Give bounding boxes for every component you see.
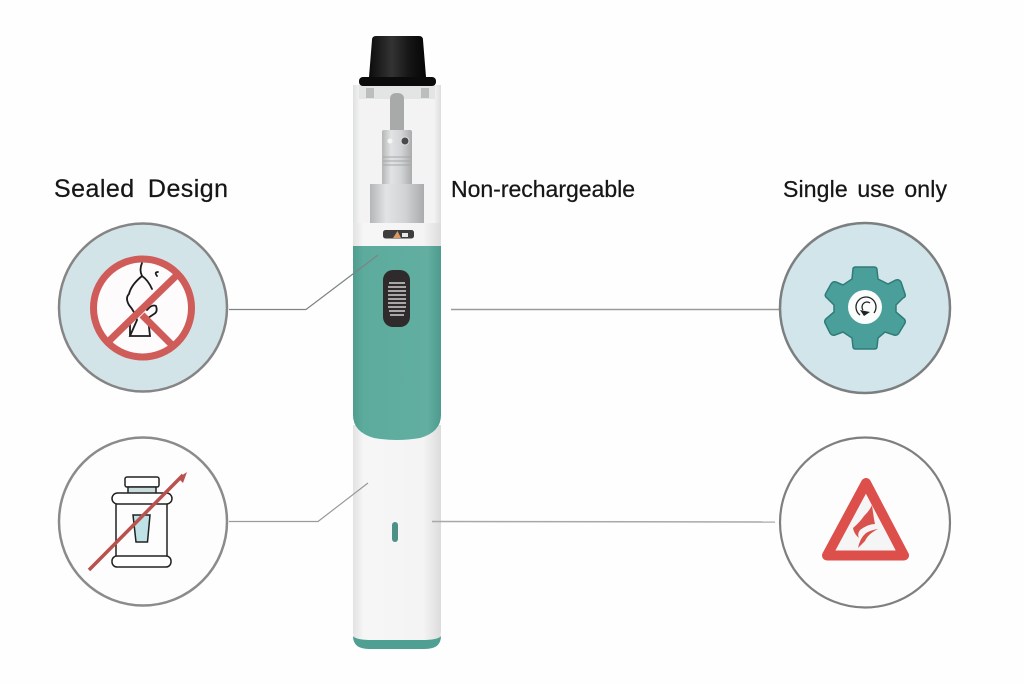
white collar [353, 223, 441, 247]
leader line: bottom right [432, 520, 775, 523]
flame [853, 505, 878, 548]
rotation arrow [856, 297, 876, 315]
mouthpiece [359, 36, 436, 86]
gear [825, 267, 905, 349]
warning triangle [827, 483, 904, 556]
lower white body [353, 425, 441, 648]
status slot [392, 522, 398, 542]
teal base cap [353, 636, 441, 649]
teal body panel [353, 246, 441, 440]
heading: Sealed Design: Sealed Design [54, 175, 228, 203]
icon circle: no refill [59, 438, 227, 606]
leader line: bottom left [229, 483, 368, 522]
device: vape pen [353, 36, 441, 649]
icon circle: flammable warning [780, 438, 950, 608]
leader line: top left [229, 255, 378, 310]
glass tank [353, 85, 441, 224]
bottle sketch [127, 263, 158, 336]
icon circle: gear [780, 223, 950, 393]
heading: Non-rechargeable: Non-rechargeable [451, 176, 635, 202]
prohibition sign [94, 259, 192, 357]
leader line: top right [451, 308, 780, 310]
refill jar [112, 477, 172, 567]
diagonal strike arrow [89, 472, 187, 570]
icon circle: no bottle [59, 224, 227, 392]
gear hub [848, 290, 882, 324]
air vent grill [383, 270, 410, 327]
inner metal core [370, 93, 424, 223]
indicator badge [383, 230, 414, 238]
heading: Single use only: Single use only [783, 176, 948, 202]
